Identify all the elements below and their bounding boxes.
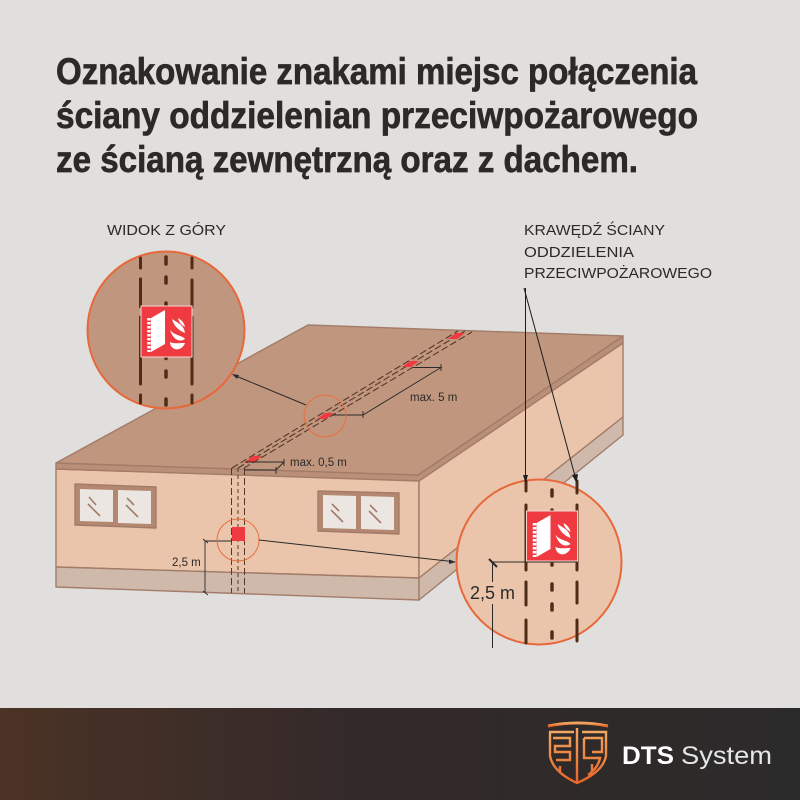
roof markers	[245, 333, 465, 462]
side plinth	[419, 417, 623, 600]
roof joint dashed lines	[232, 331, 472, 468]
dimension: wall 2,5 m	[203, 539, 232, 595]
label: fire wall edge: KRAWĘDŹ ŚCIANY	[524, 221, 665, 239]
icon: DTS shield logo	[548, 723, 608, 783]
brand name: System	[681, 742, 772, 770]
left window	[75, 484, 156, 528]
title: Oznakowanie znakami miejsc połączenia	[56, 51, 697, 92]
label: top view: WIDOK Z GÓRY	[107, 222, 226, 239]
arrows to wall edges	[523, 288, 578, 483]
front plinth	[56, 567, 419, 600]
label: fire wall edge	[524, 221, 712, 282]
top view detail circle	[88, 252, 244, 408]
footer band	[0, 708, 800, 800]
side wall	[419, 343, 623, 578]
icon: fire door sign top view	[141, 306, 192, 357]
title	[56, 51, 698, 180]
label: fire wall edge: ODDZIELENIA	[524, 245, 634, 261]
right window	[318, 491, 399, 534]
title: ściany oddzielenian przeciwpożarowego	[56, 95, 698, 136]
brand name: DTS	[622, 742, 674, 770]
dimension: detail 2,5 m	[489, 559, 577, 648]
wall joint dashed lines	[232, 468, 244, 593]
roof	[56, 325, 623, 475]
front wall	[56, 469, 419, 578]
label: 2,5 m: 2,5 m	[172, 557, 201, 569]
label: detail 2,5 m: 2,5 m	[470, 583, 515, 603]
roof edge	[56, 336, 623, 481]
wall detail ring	[217, 519, 259, 561]
wall view detail circle	[456, 480, 622, 648]
icon: fire door sign wall view	[526, 511, 578, 561]
label: max 5 m: max. 5 m	[410, 392, 457, 404]
leader arrow to top view	[232, 374, 306, 405]
dimension: max 5 m	[333, 364, 441, 418]
label: fire wall edge: PRZECIWPOŻAROWEGO	[524, 264, 712, 282]
leader arrow to wall detail	[259, 540, 456, 564]
roof detail ring	[304, 395, 346, 437]
building	[56, 325, 623, 600]
dimension: max 0,5 m	[244, 459, 284, 474]
wall marker	[232, 527, 245, 541]
label: max 0,5 m: max. 0,5 m	[290, 457, 347, 469]
brand name	[622, 742, 772, 770]
title: ze ścianą zewnętrzną oraz z dachem.	[56, 139, 638, 180]
